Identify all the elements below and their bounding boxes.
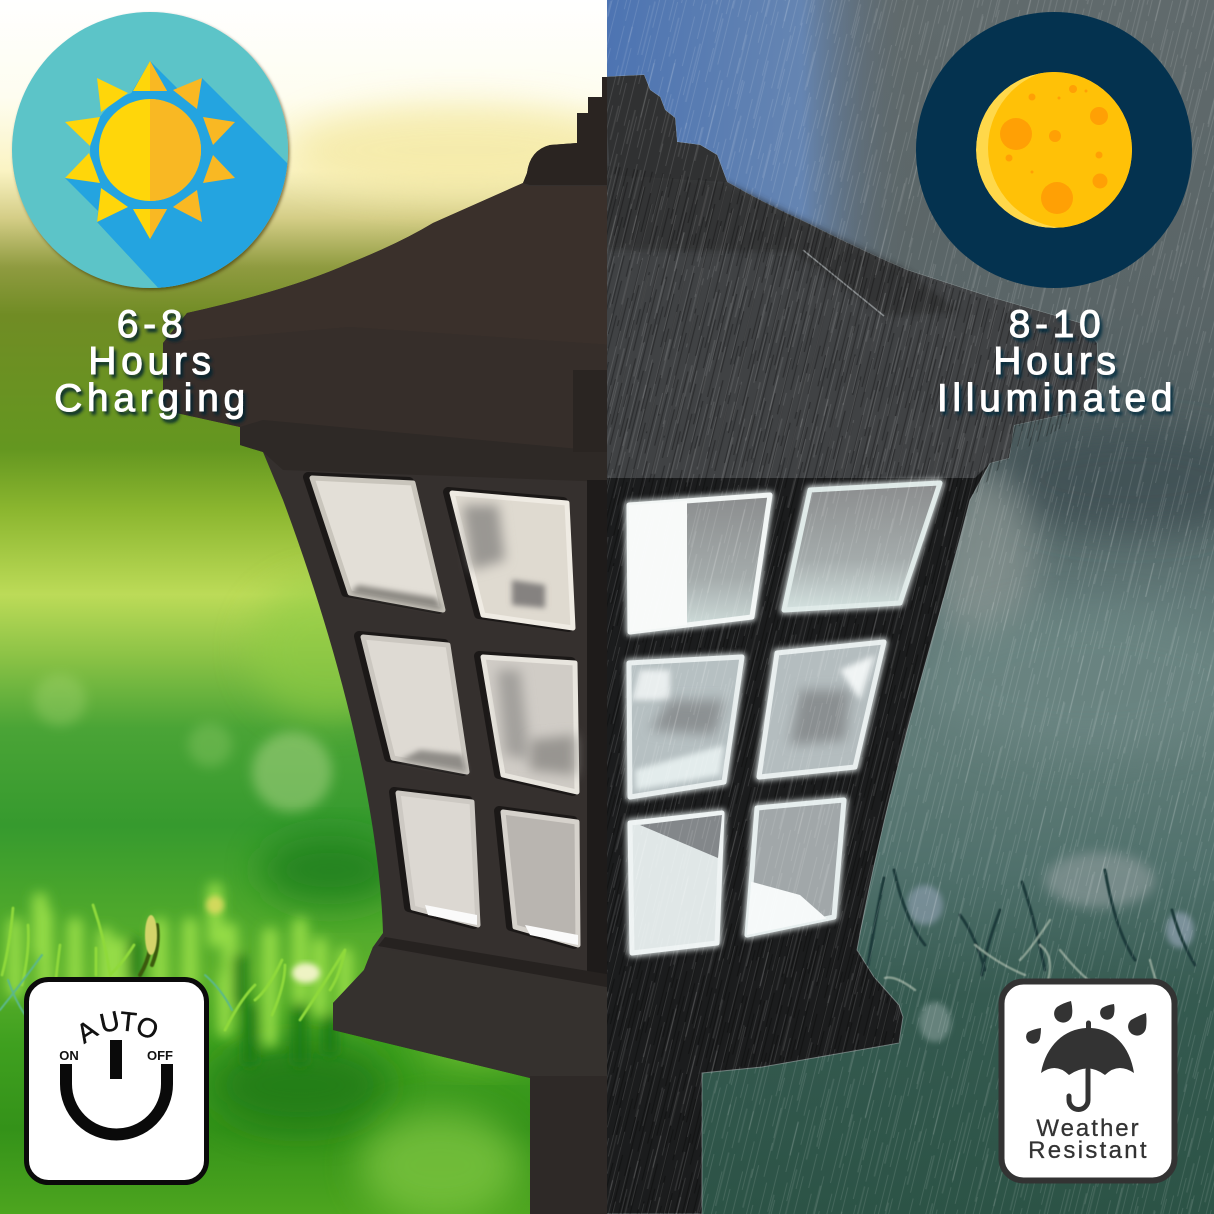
sun rays (65, 61, 167, 239)
lower band (240, 422, 582, 481)
lantern silhouette (163, 143, 607, 1078)
night finial (604, 75, 727, 182)
heading: charging hours: Charging (54, 377, 250, 420)
heading: charging hours (54, 303, 250, 420)
resistant label: Resistant (1028, 1137, 1149, 1164)
icon: moon badge (916, 12, 1192, 288)
heading: illuminated hours: Hours (993, 340, 1121, 383)
base block (333, 947, 530, 1078)
power arc (66, 1064, 167, 1134)
icon: sun badge (11, 12, 292, 292)
rain drops (1026, 1001, 1146, 1044)
dark hatch on lantern (604, 165, 1097, 1214)
night roof shadow band (604, 165, 960, 316)
sharp grass blades (0, 905, 345, 1030)
blurred grass clumps (15, 890, 345, 1060)
centre corner post (587, 480, 607, 974)
lantern: daylight half (163, 77, 612, 1214)
panel: stormy night background (607, 0, 1214, 1214)
auto label: O (132, 1010, 163, 1046)
wet grass blades (868, 870, 1195, 1000)
off label: OFF (147, 1048, 173, 1063)
panes glow (629, 483, 940, 953)
sun disc (99, 99, 201, 201)
auto label: T (118, 1006, 138, 1038)
roof crease line (803, 250, 884, 316)
night silhouette (604, 75, 1097, 1214)
auto label: U (97, 1005, 122, 1039)
power bar (110, 1040, 122, 1079)
flower and seed heads (145, 896, 320, 983)
umbrella (1041, 1020, 1134, 1110)
night window panes (625, 483, 940, 953)
roof cap and finial (523, 77, 612, 185)
icon: weather resistant badge (1002, 982, 1174, 1180)
roof face (163, 183, 523, 343)
heading: charging hours: Hours (88, 340, 216, 383)
lantern: night half (604, 75, 1097, 1214)
on label: ON (59, 1048, 79, 1063)
night roof (604, 75, 1097, 478)
roof corner shade (573, 370, 607, 452)
window panes (312, 478, 578, 945)
heading: illuminated hours: Illuminated (937, 377, 1177, 420)
panel: daytime sunny background (0, 0, 630, 1214)
heading: illuminated hours (937, 303, 1177, 420)
fascia (168, 411, 240, 427)
heading: charging hours: 6-8 (117, 303, 187, 346)
weather label: Weather (1036, 1115, 1141, 1142)
rain overlay (607, 0, 1214, 1214)
moon craters (1000, 85, 1108, 214)
heading: illuminated hours: 8-10 (1009, 303, 1105, 346)
auto label: A (71, 1014, 102, 1049)
stake (530, 1076, 612, 1214)
icon: auto on off switch badge (26, 980, 206, 1182)
pane recesses (308, 477, 574, 944)
